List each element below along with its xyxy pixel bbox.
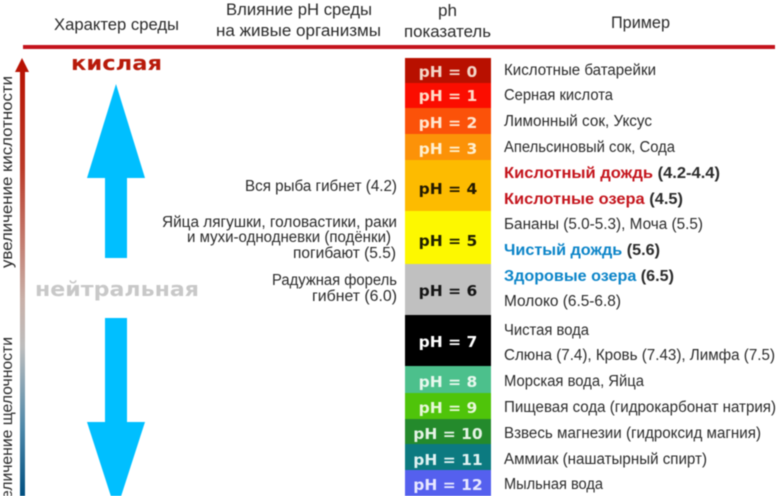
pH 4: pH = 4 [419, 180, 478, 198]
example milk: Молоко (6.5-6.8) [504, 293, 621, 310]
pH 7 [405, 315, 491, 366]
up arrow [87, 84, 145, 258]
example ammonia: Аммиак (нашатырный спирт) [504, 451, 707, 468]
example acid rain: Кислотный дождь (4.2-4.4) [504, 165, 720, 182]
heading: ph indicator [404, 1, 491, 41]
pH 9 [405, 393, 491, 419]
pH 5: pH = 5 [419, 232, 477, 250]
pH 11: pH = 11 [413, 451, 483, 469]
effect: rainbow trout [272, 272, 397, 305]
label: neutral: нейтральная [35, 277, 199, 301]
effect: all fish: Вся рыба гибнет (4.2) [245, 178, 397, 195]
example soapy water: Мыльная вода [504, 476, 603, 493]
example baking soda: Пищевая сода (гидрокарбонат натрия) [504, 399, 776, 416]
example magnesia: Взвесь магнезии (гидроксид магния) [504, 425, 761, 442]
pH 10 [405, 419, 491, 444]
gradient scale arrow [15, 58, 29, 496]
pH 5 [405, 211, 491, 264]
down arrow [87, 318, 145, 496]
pH 12: pH = 12 [413, 476, 483, 494]
effect: frog eggs: погибают (5.5) [293, 245, 396, 262]
pH 6 [405, 264, 491, 315]
example bananas: Бананы (5.0-5.3), Моча (5.5) [504, 216, 703, 233]
example pH 1: Серная кислота [504, 87, 613, 104]
pH 4 [405, 160, 491, 211]
pH 1: pH = 1 [419, 87, 477, 105]
example healthy lakes: Здоровые озера (6.5) [504, 268, 674, 285]
effect: frog eggs: Яйца лягушки, головастики, раки [162, 214, 397, 231]
pH 11 [405, 444, 491, 470]
pH 12 [405, 470, 491, 496]
example seawater: Морская вода, Яйца [504, 373, 644, 390]
pH 6: pH = 6 [419, 282, 477, 300]
heading: effect on organisms [216, 0, 381, 40]
pH 2 [405, 108, 491, 134]
label: acidic: кислая [71, 51, 162, 75]
example pH 0: Кислотные батарейки [504, 62, 656, 79]
example saliva blood lymph: Слюна (7.4), Кровь (7.43), Лимфа (7.5) [504, 347, 775, 364]
heading: character of medium: Характер среды [54, 15, 179, 34]
example pure water: Чистая вода [504, 322, 589, 339]
pH 8 [405, 366, 491, 393]
organism effects text [162, 178, 397, 305]
pH 0 [405, 58, 491, 83]
example clean rain: Чистый дождь (5.6) [504, 242, 660, 259]
example pH 3: Апельсиновый сок, Сода [504, 139, 675, 156]
pH 3 [405, 134, 491, 160]
heading: effect on organisms: на живые организмы [216, 21, 381, 40]
examples list [504, 62, 776, 493]
effect: rainbow trout: гибнет (6.0) [312, 288, 397, 305]
example acid lakes: Кислотные озера (4.5) [504, 191, 683, 208]
example pH 2: Лимонный сок, Уксус [504, 113, 652, 130]
pH 0: pH = 0 [419, 63, 478, 81]
header divider line [23, 45, 775, 49]
effect: frog eggs: и мухи-однодневки (подёнки) [187, 229, 391, 246]
pH 9: pH = 9 [419, 399, 477, 417]
effect: frog eggs [162, 214, 397, 262]
pH 1 [405, 83, 491, 108]
pH 3: pH = 3 [419, 140, 477, 158]
pH 2: pH = 2 [419, 114, 477, 132]
header row [54, 0, 670, 41]
pH 7: pH = 7 [419, 333, 477, 351]
heading: ph indicator: ph [438, 1, 457, 20]
pH 10: pH = 10 [413, 425, 483, 443]
heading: ph indicator: показатель [404, 22, 491, 41]
pH 8: pH = 8 [419, 373, 477, 391]
effect: rainbow trout: Радужная форель [272, 272, 397, 289]
heading: effect on organisms: Влияние pH среды [226, 0, 372, 19]
pH scale [405, 58, 491, 496]
heading: example: Пример [611, 13, 670, 32]
